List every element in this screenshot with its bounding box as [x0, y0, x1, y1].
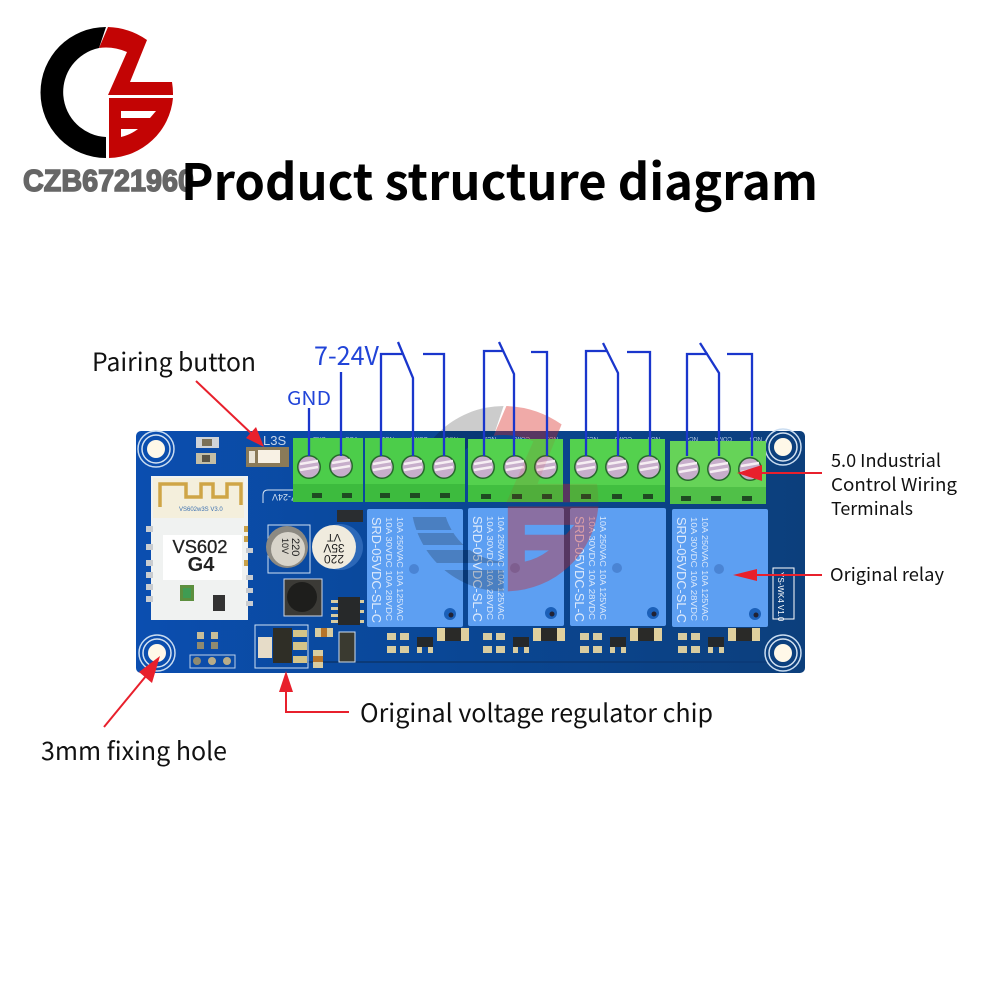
terminal silk labels: NO4	[749, 435, 762, 441]
arrow: original relay	[733, 569, 822, 581]
label: wiring terminals	[831, 447, 957, 521]
logo	[23, 27, 194, 198]
board substrate	[136, 431, 805, 673]
terminal slots	[312, 493, 752, 501]
label: wiring terminals: Control Wiring	[831, 471, 957, 497]
label: 7-24V: 7-24V	[314, 336, 379, 373]
capacitors: 220	[289, 538, 301, 556]
green wiring terminals	[293, 438, 766, 504]
small connector	[190, 632, 235, 668]
capacitors: 10V	[280, 538, 290, 554]
label: wiring terminals: Terminals	[831, 495, 913, 521]
pairing button component	[196, 433, 289, 467]
label: voltage regulator: Original voltage regulator chip	[360, 694, 713, 730]
wireless module: G4	[188, 554, 215, 576]
arrow: pairing button	[196, 381, 264, 447]
silk 7-24V: 7-24V	[272, 492, 296, 502]
terminal silk labels: NO1	[445, 435, 458, 441]
relays	[367, 508, 768, 627]
silk 7-24V	[263, 490, 297, 503]
terminal silk labels: COM4	[714, 435, 732, 441]
label: GND: GND	[287, 384, 331, 411]
terminal silk labels: NO3	[647, 435, 660, 441]
smd parts row	[387, 628, 760, 653]
wireless module: VS602	[172, 537, 228, 557]
label: pairing button: Pairing button	[92, 343, 256, 379]
logo: red Z	[99, 27, 173, 95]
mounting holes	[138, 429, 801, 671]
capacitors: 35V	[323, 541, 345, 555]
title: Product structure diagram	[181, 143, 818, 215]
terminal silk labels: NC3	[585, 435, 598, 441]
panel: relay board	[136, 429, 805, 673]
driver chip	[313, 597, 364, 668]
arrow: wiring terminals	[737, 465, 822, 481]
label: wiring terminals: 5.0 Industrial	[831, 447, 941, 473]
label: original relay: Original relay	[830, 561, 945, 587]
arrow: voltage regulator	[279, 671, 349, 712]
label: fixing hole: 3mm fixing hole	[41, 732, 227, 768]
blue wiring diagram	[309, 342, 752, 456]
version label: YS-WK4 V1.0	[776, 572, 785, 622]
terminal silk labels	[312, 435, 762, 441]
watermark faint overlay on terminals	[494, 406, 598, 591]
terminal silk labels: NC4	[685, 435, 698, 441]
version label	[773, 568, 794, 622]
terminal silk labels: VCC	[345, 435, 358, 441]
logo: brand text: CZB6721960	[23, 163, 194, 198]
logo: black C	[40, 27, 106, 158]
capacitors: 220	[324, 552, 344, 566]
terminal silk labels: COM2	[512, 435, 530, 441]
capacitors: VT	[327, 531, 341, 543]
wireless module: VS602w3S V3.0	[179, 507, 223, 513]
logo: red B	[109, 98, 173, 158]
terminal silk labels: NO2	[545, 435, 558, 441]
voltage regulator chip	[255, 625, 308, 668]
terminal silk labels: COM1	[410, 435, 428, 441]
terminal screws	[297, 454, 762, 481]
terminal silk labels: NC1	[381, 435, 394, 441]
terminal silk labels: NC2	[483, 435, 496, 441]
watermark logo	[411, 406, 598, 591]
terminal silk labels: GND	[312, 435, 326, 441]
terminal silk labels: COM3	[614, 435, 632, 441]
capacitors	[266, 510, 363, 573]
pairing button component: L3S	[263, 433, 286, 448]
arrow: fixing hole	[104, 656, 160, 727]
inductor	[284, 579, 322, 616]
wireless module	[146, 476, 253, 620]
